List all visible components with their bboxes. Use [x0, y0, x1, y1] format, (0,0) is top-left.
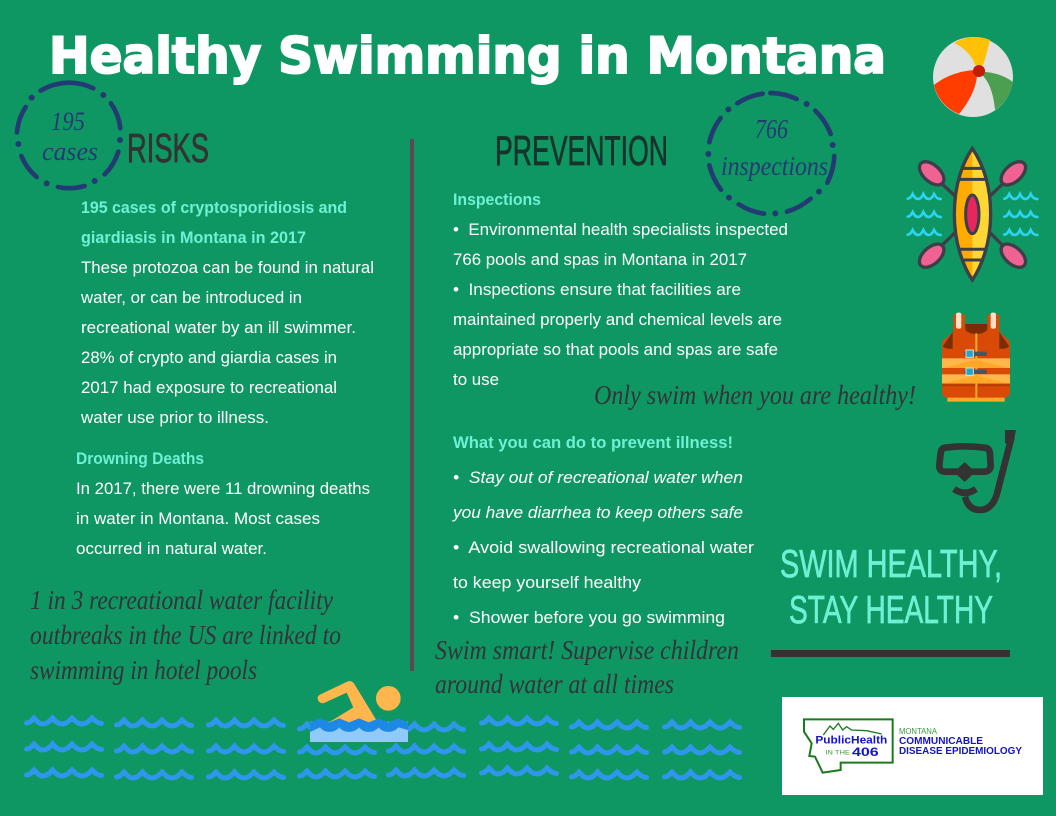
text block: inspections: Inspections: [453, 190, 541, 209]
text block: inspections: appropriate so that pools and spas are safe: [453, 340, 778, 359]
text block: prevent illness: • Stay out of recreational water when: [453, 468, 743, 487]
text block: drowning deaths: in water in Montana. Most cases: [76, 509, 320, 528]
text block: cases: [80, 198, 374, 427]
title: Healthy Swimming in Montana: [49, 27, 886, 85]
text block: cases: 195 cases of cryptosporidiosis and: [81, 198, 347, 217]
logo text: [899, 727, 1022, 757]
text block: prevent illness: you have diarrhea to keep others safe: [452, 503, 743, 522]
icon: kayak: [908, 148, 1037, 280]
text block: drowning deaths: Drowning Deaths: [76, 449, 204, 468]
text block: inspections: • Environmental health specialists inspected: [453, 220, 788, 239]
logo text: DISEASE EPIDEMIOLOGY: [899, 746, 1022, 757]
badge ring: [708, 93, 834, 214]
slogan: [780, 543, 1002, 632]
text block: prevent illness: • Avoid swallowing recreational water: [453, 538, 754, 557]
text block: drowning deaths: In 2017, there were 11 drowning deaths: [76, 479, 370, 498]
badge text: 195: [51, 107, 85, 136]
column divider: [410, 139, 414, 671]
logo mark: Montana outline: IN THE: [825, 751, 850, 757]
text block: cases: water use prior to illness.: [80, 408, 269, 427]
text block: cases: giardiasis in Montana in 2017: [81, 228, 306, 247]
text block: prevent illness: What you can do to prevent illness!: [453, 433, 733, 452]
text block: cases: water, or can be introduced in: [80, 288, 302, 307]
text block: inspections: maintained properly and chemical levels are: [453, 310, 782, 329]
text block: inspections: [453, 190, 788, 389]
icon: beach ball: [933, 37, 1013, 117]
text block: inspections: • Inspections ensure that facilities are: [453, 280, 741, 299]
text block: prevent illness: [452, 433, 754, 627]
badge text: cases: [42, 137, 98, 166]
text block: prevent illness: to keep yourself healthy: [453, 573, 642, 592]
logo mark: Montana outline: 406: [852, 746, 879, 759]
callout: swim smart: [435, 635, 739, 699]
text block: prevent illness: • Shower before you go swimming: [453, 608, 725, 627]
text block: drowning deaths: [76, 449, 370, 558]
text block: drowning deaths: occurred in natural water.: [76, 539, 267, 558]
callout: hotel pools: [30, 585, 341, 685]
text block: inspections: to use: [453, 370, 499, 389]
icon: snorkel mask: [939, 430, 1016, 510]
slogan underline: [771, 650, 1010, 657]
panel: risks circle badge: [17, 83, 120, 188]
text block: inspections: 766 pools and spas in Montana in 2017: [453, 250, 747, 269]
panel: inspections circle badge: [708, 93, 834, 214]
text block: cases: 2017 had exposure to recreational: [81, 378, 337, 397]
logo text: MONTANA: [899, 727, 938, 736]
callout: hotel pools: 1 in 3 recreational water facility: [30, 585, 333, 615]
logo mark: Montana outline: PublicHealth: [815, 735, 888, 747]
logo text: COMMUNICABLE: [899, 736, 983, 747]
icon: life jacket: [942, 313, 1010, 402]
heading: risks: RISKS: [127, 125, 209, 171]
text block: cases: recreational water by an ill swimmer.: [81, 318, 356, 337]
logo mark: Montana outline: [804, 719, 893, 773]
badge text: 766: [755, 114, 788, 144]
badge ring: [17, 83, 120, 188]
badge text: [42, 107, 98, 166]
text block: cases: These protozoa can be found in natural: [81, 258, 374, 277]
callout: hotel pools: outbreaks in the US are linked to: [30, 620, 341, 650]
callout: swim smart: Swim smart! Supervise children: [435, 635, 739, 665]
badge text: [721, 114, 828, 181]
callout: swim smart: around water at all times: [435, 669, 674, 699]
water waves: [26, 718, 740, 778]
icon: swimmer: [310, 681, 408, 742]
callout: only swim when healthy: Only swim when you are healthy!: [594, 380, 916, 410]
badge text: inspections: [721, 151, 828, 181]
logo: [782, 697, 1043, 795]
heading: prevention: PREVENTION: [495, 127, 668, 174]
callout: hotel pools: swimming in hotel pools: [30, 655, 257, 685]
text block: cases: 28% of crypto and giardia cases in: [81, 348, 337, 367]
